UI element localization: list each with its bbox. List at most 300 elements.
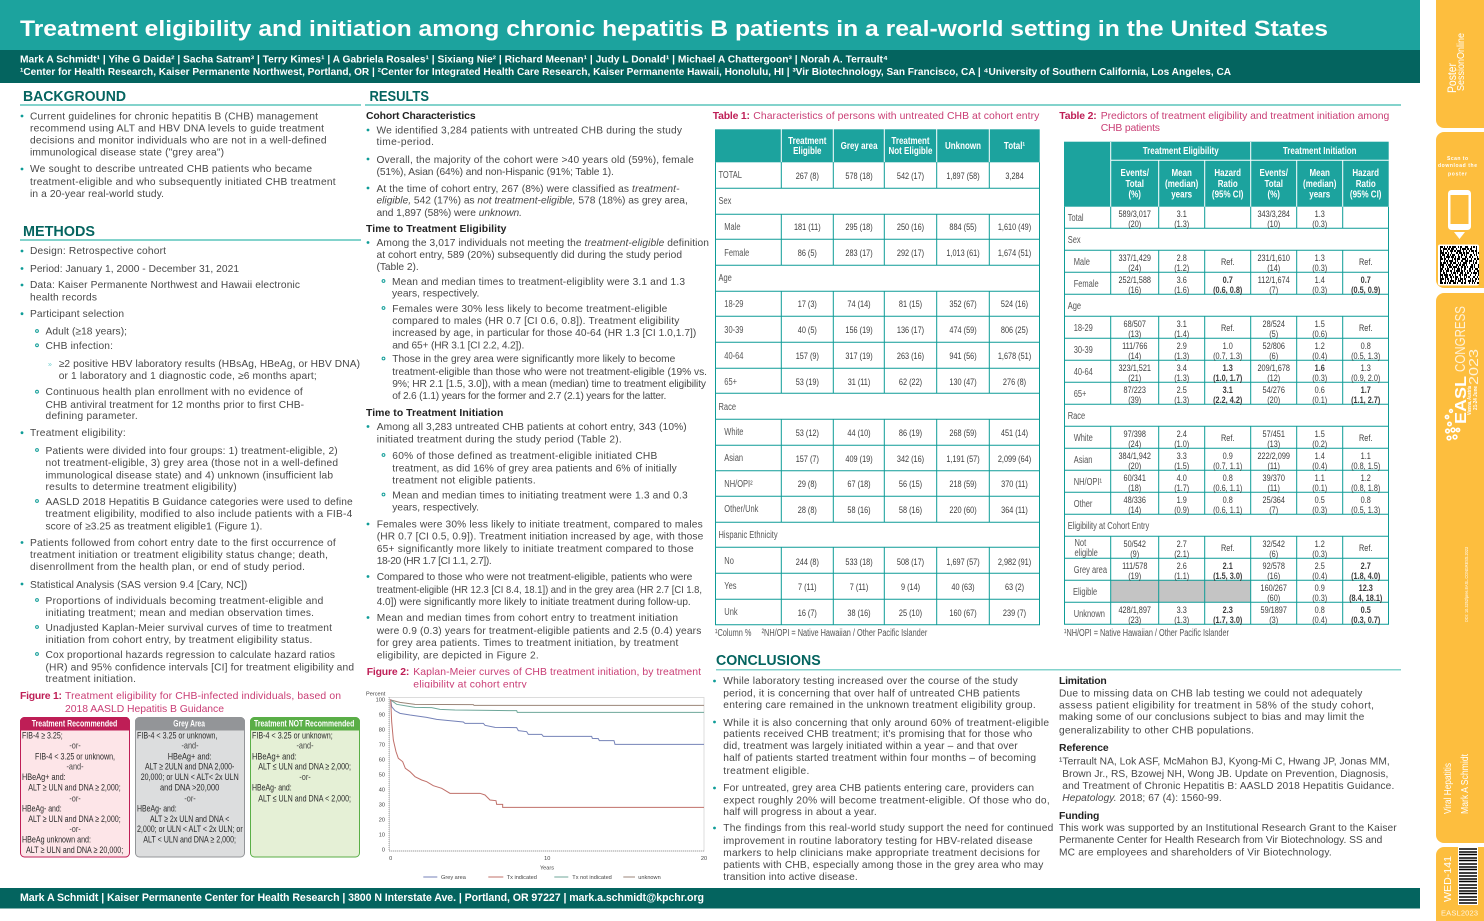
reference: Reference [1059,743,1109,754]
panel: results text: 65+ significantly more likely to initiate treatment compared to those [377,544,694,555]
table 1 body: 86 (19) [899,427,922,438]
panel: conclusions: markers to help clinicians make appropriate treatment decisions for [723,848,1041,859]
table 2 body: 1.2 [1315,538,1325,549]
table 1 footnote: ¹Column % ²NH/OPI = Native Hawaiian / Other Pacific Islander [715,628,928,639]
panel: conclusions: expect roughly 20% will become treatment-eligible. Of those who do, [723,796,1050,806]
panel: conclusions: period, it is concerning that over half of untreated CHB patients [723,688,1020,700]
side panel: EASL congress: DOI: 10.3252/pres.EASL.CONGRESS.2023 [1464,547,1469,622]
table 2 body: Ref. [1359,322,1372,333]
table 2 body: (0.5, 1.3) [1351,504,1380,515]
table 1 body: 364 (11) [1001,504,1028,515]
box: treatment recommended: -and- [66,760,84,772]
table 1 body: 17 (3) [798,298,817,309]
table 2 body: (24) [1128,438,1141,449]
table 2 body: (13) [1267,438,1280,449]
table 2 body: (6) [1269,548,1278,559]
table 2 body: (20) [1128,460,1141,471]
table 2 body: 39/370 [1263,472,1285,483]
table 1 body: 56 (15) [899,478,922,489]
table 2 body: (1.2) [1174,262,1189,273]
table 1 body: 7 (11) [850,581,868,592]
table 2 body: (1.3) [1174,614,1189,625]
table 2 body: (0.6, 0.8) [1213,284,1242,295]
table 1 body: 342 (16) [897,453,924,464]
table 2 body: (16) [1267,570,1280,581]
table 1 body: 1,678 (51) [998,350,1031,361]
heading: conclusions: CONCLUSIONS [716,653,821,669]
table 1 body: 267 (8) [796,170,819,181]
table 2 body: (12) [1267,372,1280,383]
box: grey area: Grey Area [173,718,205,730]
table 1 body: 28 (8) [798,504,817,515]
table 1 body: 62 (22) [899,376,922,387]
table 1 body: 578 (18) [845,170,873,181]
box: treatment not recommended: -and- [296,740,314,751]
table 2 body: 1.2 [1315,340,1325,351]
table 1 body: 1,897 (58) [946,170,980,181]
table 1 body: 474 (59) [949,324,977,335]
chart axes: 50 [379,772,385,778]
icon: EASL dots [1445,410,1460,440]
table 2 body: Ref. [1359,432,1372,443]
table 2 body: Total [1068,212,1084,223]
table 1 body: TOTAL [718,169,742,180]
table 2 body: (14) [1128,350,1141,361]
table 2 body: 3.1 [1177,208,1187,219]
panel: conclusions: treatment eligible. [723,766,809,777]
table 2 body: 0.6 [1315,384,1325,395]
box: treatment not recommended: Treatment NOT Recommended [254,718,354,730]
table 2 body: (2.1) [1174,548,1189,559]
table 2 header: Ratio [1356,178,1376,189]
table 2 body: (14) [1128,504,1141,515]
table 2 body: Other [1074,498,1092,509]
panel: results text: At the time of cohort entry, 267 (8%) were classified as treatment- [376,184,680,195]
chart axes: 0 [389,856,392,862]
side panel: scan to download: Scan to [1447,156,1468,162]
chart axes: Percent [366,692,386,698]
side panel: EASL congress [1436,293,1484,843]
table 2 body: 2.8 [1177,252,1187,263]
funding: MC are employees and shareholders of Vir Biotechnology. [1059,848,1332,858]
table 2 body: 68/507 [1124,318,1146,329]
table 2 body: (14) [1267,262,1280,273]
table 1 body: 533 (18) [845,556,873,567]
reference: and Treatment of Chronic Hepatitis B: AASLD 2018 Hepatitis Guidance. [1062,781,1394,792]
table 1 body: Race [718,401,736,412]
table 2 body: 0.8 [1361,340,1371,351]
side panel: EASL congress: 21-24 June [1473,386,1479,410]
icon: QR code [1438,244,1479,286]
table 2 body: (0.2) [1312,438,1327,449]
table 2 body: (0.5, 1.3) [1351,350,1380,361]
table 2 body: (0.6) [1312,328,1327,339]
side panel: poster number and barcode: WED-141 [1443,856,1454,902]
panel: methods: Proportions of individuals becoming treatment-eligible and [46,596,324,607]
table 2 body: (0.8, 1.8) [1351,482,1380,493]
table 1 body: 218 (59) [949,478,977,489]
table 2 body: 1.1 [1315,472,1325,483]
panel: methods: Design: Retrospective cohort [30,246,166,257]
table 2 body: (1.0) [1174,438,1189,449]
panel: conclusions: half will progress in about a year. [723,807,877,818]
table 1 body: 2,099 (64) [998,453,1031,464]
table 2 body: 1.4 [1315,274,1325,285]
table 2 body: Ref. [1221,542,1234,553]
table 2 body: (1.7, 3.0) [1213,614,1242,625]
panel: methods [20,224,361,685]
panel: results text: Cohort Characteristics [366,111,476,122]
table 2 body: (0.4) [1312,460,1327,471]
table 2 body: 0.8 [1315,604,1325,615]
table 1 body: 524 (16) [1001,298,1028,309]
chart axes: 90 [379,712,385,718]
table 1 body: Other/Unk [724,503,759,514]
table 2 body: (0.3) [1312,504,1327,515]
table 1 body: 292 (17) [897,247,924,258]
table 1 body: 58 (16) [899,504,922,515]
limitation: Due to missing data on CHB lab testing we could not adequately [1059,688,1363,700]
chart legend: Tx not indicated [572,875,612,881]
table 2 body: Eligible [1073,586,1097,597]
table 1 body: 7 (11) [798,581,817,592]
table 2 body: (1.8, 4.0) [1351,570,1380,581]
panel: methods: Patients followed from cohort entry date to the first occurrence of [30,538,336,549]
table 1 body: 239 (7) [1003,607,1026,618]
table 2 body: Ref. [1221,322,1234,333]
panel: results text: Among all 3,283 untreated CHB patients at cohort entry, 343 (10%) [377,422,687,433]
box: grey area: ALT ≥ 2ULN and DNA 2,000- [145,761,234,772]
table 2 header: Hazard [1352,167,1379,178]
table 2 body: Female [1074,278,1099,289]
table 2 body: (0.6, 1.1) [1213,482,1242,493]
table 2 header: Total [1125,178,1144,189]
funding: Funding [1059,811,1099,822]
table 1 body: 58 (16) [847,504,871,515]
affiliations: ¹Center for Health Research, Kaiser Permanente Northwest, Portland, OR | ²Center for Integrated Health Care Research, Kaiser Permanente Hawaii, Honolulu, HI | ³Vir Biotechnology, San Francisco, CA | ⁴University of Southern California, Los Angeles, CA [20,66,1231,78]
side strip [1436,0,1484,921]
table 2 body: (13) [1128,328,1141,339]
table 2 body: 1.2 [1361,472,1371,483]
chart axes [366,692,707,872]
chart axes: 20 [379,817,385,823]
panel: results text: 18-20 (HR 1.7 [CI 1.1, 2.7]). [377,556,492,567]
box: treatment not recommended: ALT ≤ ULN and DNA < 2,000; [258,793,351,804]
box: grey area: FIB-4 < 3.25 or unknown, [137,730,217,741]
panel: methods: Adult (≥18 years); [46,326,127,338]
table 1 body: Female [724,247,749,258]
table 2 body: 0.8 [1223,494,1233,505]
side panel: poster number and barcode [1436,847,1484,921]
side panel: poster session online: SessionOnline [1456,33,1467,91]
table 2 body: 1.7 [1361,384,1371,395]
table 2 body: 48/336 [1124,494,1146,505]
table 1 body: 53 (12) [796,427,819,438]
table 1: characteristics [713,111,1040,639]
table 2 body: 50/542 [1124,538,1146,549]
panel: methods: » [48,362,52,368]
panel: results text: Females were 30% less likely to initiate treatment, compared to males [377,520,703,530]
table 2 body: 112/1,674 [1258,274,1290,285]
panel: methods: Statistical Analysis (SAS version 9.4 [Cary, NC]) [30,580,247,591]
panel: results text: treatment-eligible than those who were not treatment-eligible (19% vs. [392,367,707,378]
table 2 body: 343/3,284 [1257,208,1290,219]
panel: results text: were 0.9 (0.3) years for treatment-eligible patients and 2.5 (0.4) years [376,626,701,637]
table 2 body: NH/OPI¹ [1074,476,1102,487]
table 2 body: 87/223 [1124,384,1146,395]
limitation: generalizability to other CHB populations. [1059,726,1254,736]
chart axes: 30 [379,802,385,808]
table 1 header row [788,135,1025,156]
table 2 body: 40-64 [1074,366,1093,377]
table 2 header: Hazard [1214,167,1241,178]
table 2 body: 1.0 [1223,340,1233,351]
table 2 body: 59/1897 [1261,604,1287,615]
table 1 header row: Grey area [841,140,878,151]
table 1 body: 16 (7) [798,607,817,618]
table 2 body: (18) [1128,482,1141,493]
panel: methods: ≥2 positive HBV laboratory results (HBsAg, HBeAg, or HBV DNA) [59,359,360,370]
figure 2 caption: Kaplan-Meier curves of CHB treatment initiation, by treatment [413,667,701,678]
table 1 body: 157 (9) [796,350,819,361]
side panel: poster session online: Poster [1445,63,1459,93]
table 1 body: 40-64 [724,350,744,361]
box: treatment recommended: HBeAg unknown and: [22,834,91,845]
table 2 body: Not [1074,537,1087,548]
table 2 body: (0.3) [1312,372,1327,383]
panel: conclusions: patients received CHB treatment; it's promising that for those who [723,729,1033,740]
panel: methods: initiating treatment; mean and median observation times. [46,608,314,619]
panel: methods: Patients were divided into four groups: 1) treatment-eligible, 2) [46,446,338,457]
table 2 caption: CHB patients [1101,123,1160,134]
table 2 body: 252/1,588 [1118,274,1151,285]
table 2 caption [1059,111,1390,134]
table 2 body: (60) [1267,592,1280,603]
table 1 caption: Characteristics of persons with untreated CHB at cohort entry [753,111,1040,122]
box: treatment not recommended: FIB-4 < 3.25 or unknown; [252,730,333,741]
panel: results text: Mean and median times to treatment-eligiblity were 3.1 and 1.3 [392,277,685,288]
table 1 body: 9 (14) [901,581,920,592]
box: treatment recommended: ALT ≥ ULN and DNA ≥ 2,000; [28,814,121,825]
panel: background: in a 20-year real-world study. [30,189,164,200]
table 2 header: (95% CI) [1350,189,1381,200]
side panel: EASL congress: Vienna, Austria [1467,386,1473,415]
table 1 body: 250 (16) [897,221,924,232]
table 2 body: (3) [1269,614,1278,625]
panel: results text: Females were 30% less likely to become treatment-eligible [392,304,668,315]
table 1 body: Yes [724,580,737,591]
table 1 body: Age [718,272,732,283]
panel: results text: treatment, as did 16% of grey area patients and 6% of initially [392,464,678,474]
box: treatment recommended: -or- [69,823,81,834]
table 1 body: 157 (7) [796,453,819,464]
chart curves [391,699,704,807]
table 1 body: 317 (19) [845,350,873,361]
table 1 header row: Treatment [891,135,930,146]
panel: conclusions: While it is also concerning that only around 60% of treatment-eligible [723,718,1049,729]
table 2 body: (0.7, 1.1) [1213,460,1242,471]
table 2 body: (0.3, 0.7) [1351,614,1380,625]
table 2 body: 323/1,521 [1118,362,1151,373]
table 2 body: 231/1,610 [1257,252,1290,263]
table 2 body: (1.4) [1174,328,1189,339]
table 2 body: 1.6 [1315,362,1325,373]
table 2 body: 2.6 [1177,560,1187,571]
table 2 body: (1.6) [1174,284,1189,295]
table 1 body: 40 (5) [798,324,817,335]
panel: results text: 9%; HR 2.1 [1.5, 3.0]), with a mean (median) time to treatment eligibility [392,379,707,390]
panel: methods: treatment initiation or treatment eligibility status change; death, [30,550,328,561]
panel: background: immunological disease state ("grey area") [30,148,224,158]
side panel: EASL congress: Mark A Schmidt [1460,754,1471,814]
table 2 body: 0.5 [1361,604,1371,615]
table 2 body: 589/3,017 [1118,208,1151,219]
figure 1 caption: Treatment eligibility for CHB-infected individuals, based on [65,691,341,702]
table 2 body: 0.9 [1223,450,1233,461]
table 2 body: Ref. [1221,432,1234,443]
box: grey area: and DNA >20,000 [160,782,219,793]
table 2 body: (21) [1128,372,1141,383]
table 2 body: 2.1 [1223,560,1233,571]
table 1 header row: Eligible [793,145,822,156]
table 1 header row: Total¹ [1004,140,1025,151]
table 1 body: 451 (14) [1001,427,1028,438]
table 2 body [1068,208,1383,625]
table 1 body [718,169,1031,618]
panel: methods: defining parameter. [46,411,138,422]
table 2 body: 1.3 [1361,362,1371,373]
side panel: poster session online [1436,0,1484,128]
funding: Permanente Center for Health Research from Vir Biotechnology. SS and [1059,835,1383,846]
table 2 body: 3.4 [1177,362,1187,373]
box: grey area: -and- [181,740,199,751]
chart axes: 40 [379,787,385,793]
table 2 body: (1.1) [1174,570,1189,581]
table 2 body: 2.4 [1177,428,1187,439]
table 1 body: 884 (55) [949,221,977,232]
table 2 body: (0.4) [1312,614,1327,625]
table 2 body: (5) [1269,328,1278,339]
table 1 body: 283 (17) [845,247,873,258]
footer bar: Mark A Schmidt | Kaiser Permanente Center for Health Research | 3800 N Interstate Ave. | Portland, OR 97227 | mark.a.schmidt@kpchr.org [20,892,704,904]
table 2 body: (1.0, 1.7) [1213,372,1242,383]
reference: Hepatology. 2018; 67 (4): 1560-99. [1062,793,1222,804]
table 1 body: 1,191 (57) [946,453,980,464]
authors: Mark A Schmidt¹ | Yihe G Daida² | Sacha Satram³ | Terry Kimes¹ | A Gabriela Rosales¹ | Sixiang Nie² | Richard Meenan¹ | Judy L Donald¹ | Michael A Chattergoon³ | Norah A. Terrault⁴ [20,54,888,66]
table 2 body: 384/1,942 [1118,450,1151,461]
table 2 body: 97/398 [1124,428,1146,439]
heading: methods: METHODS [23,224,95,240]
panel: results text: at cohort entry, 589 (20%) subsequently did during the study period [376,250,682,261]
table 2 body: Grey area [1074,564,1107,575]
table 1 body: 542 (17) [897,170,924,181]
table 2 body: Sex [1068,234,1081,245]
table 2 body: (11) [1267,460,1280,471]
table 2 body: (0.3) [1312,218,1327,229]
panel: methods: health records [30,292,97,304]
table 1 body: 67 (18) [847,478,871,489]
panel: results text: compared to males (HR 0.7 [CI 0.6, 0.8]). Treatment eligibility [392,316,680,327]
reference [1059,743,1394,804]
box: treatment recommended: Treatment Recommended [32,718,117,730]
table 2 body: 28/524 [1263,318,1285,329]
table 2 body: (0.1) [1312,394,1327,405]
panel: background: decisions and monitor individuals who are not in a well-defined [30,136,327,146]
table 1 body: 81 (15) [899,298,922,309]
table 1 body: 65+ [724,376,737,387]
panel: results text: of 2.6 (1.1) years for the former and 2.7 (2.1) years for the latter. [392,391,666,402]
side panel: EASL congress: Viral Hepatitis [1443,763,1454,814]
box: grey area: 20,000; or ULN < ALT< 2x ULN [141,772,239,783]
table 2 body: 54/276 [1263,384,1285,395]
table 1 body: 352 (67) [949,298,977,309]
table 2 body: (39) [1128,394,1141,405]
table 1 body: 38 (16) [847,607,871,618]
table 1 body: Male [724,221,741,232]
table 2 body: 57/451 [1263,428,1285,439]
table 1 body: 268 (59) [949,427,977,438]
table 1 body: Asian [724,452,743,463]
table 2 body: (0.3) [1312,284,1327,295]
table 2 footnote: ¹NH/OPI = Native Hawaiian / Other Pacific Islander [1064,628,1229,639]
table 1 body: 276 (8) [1003,376,1026,387]
funding: This work was supported by an Institutional Research Grant to the Kaiser [1059,823,1397,834]
table 1 body: NH/OPI² [724,478,753,489]
table 2 body: 111/766 [1122,340,1148,351]
panel: methods: immunological disease state) and 4) unknown (insufficient lab [46,470,333,482]
table 1 body: 244 (8) [796,556,819,567]
curve: tx indicated [391,699,704,807]
table 2 body: 60/341 [1124,472,1146,483]
table 2 header: Total [1264,178,1283,189]
panel: conclusions: improvement in routine laboratory testing for HBV-related disease [723,836,1033,847]
table 2 body: 428/1,897 [1118,604,1151,615]
funding [1059,811,1397,858]
table 1 body: Sex [718,195,732,206]
chart axes: 10 [379,832,385,838]
panel: methods: Treatment eligibility: [30,428,126,439]
limitation: assess patient eligibility for treatment in 58% of the study cohort, [1059,700,1374,712]
table 2 body: 0.7 [1361,274,1371,285]
limitation [1059,676,1374,736]
table 2 body: (0.9, 2.0) [1351,372,1380,383]
panel: methods: score of ≥3.25 as treatment eligible1 (Figure 1). [46,522,262,532]
table 2 body: (0.4) [1312,350,1327,361]
panel: methods: Continuous health plan enrollment with no evidence of [46,387,303,398]
table 2 body: (1.3) [1174,372,1189,383]
panel: methods: or 1 laboratory and 1 diagnostic code, ≥6 months apart; [59,371,317,382]
table 2 body: (1.5) [1174,460,1189,471]
table 2 body: 2.7 [1361,560,1371,571]
box: grey area [136,718,244,857]
panel: methods: CHB infection: [46,341,113,352]
panel: results text: treatment-eligible (HR 12.3 [CI 8.4, 18.1]) and in the grey area (HR 2.7 [CI 1.8, [377,585,702,596]
box: treatment not recommended: HBeAg- and: [252,782,292,793]
table 2 body: 2.5 [1177,384,1187,395]
table 2 body: (9) [1130,548,1139,559]
table 2 body: (2.2, 4.2) [1213,394,1242,405]
panel: results text: years, respectively. [392,288,479,300]
table 2 header: (%) [1128,189,1141,200]
table 2 body: (8.4, 18.1) [1349,592,1383,603]
header banner [0,0,1420,83]
table 2 body: 25/364 [1263,494,1285,505]
table 2 body: 0.7 [1223,274,1233,285]
table 2 body: Ref. [1221,256,1234,267]
panel: methods: Cox proportional hazards regression to calculate hazard ratios [46,650,335,661]
side panel: poster number and barcode: EASL2023 [1441,908,1478,918]
panel: results text: treatment not eligible patients. [392,476,536,486]
